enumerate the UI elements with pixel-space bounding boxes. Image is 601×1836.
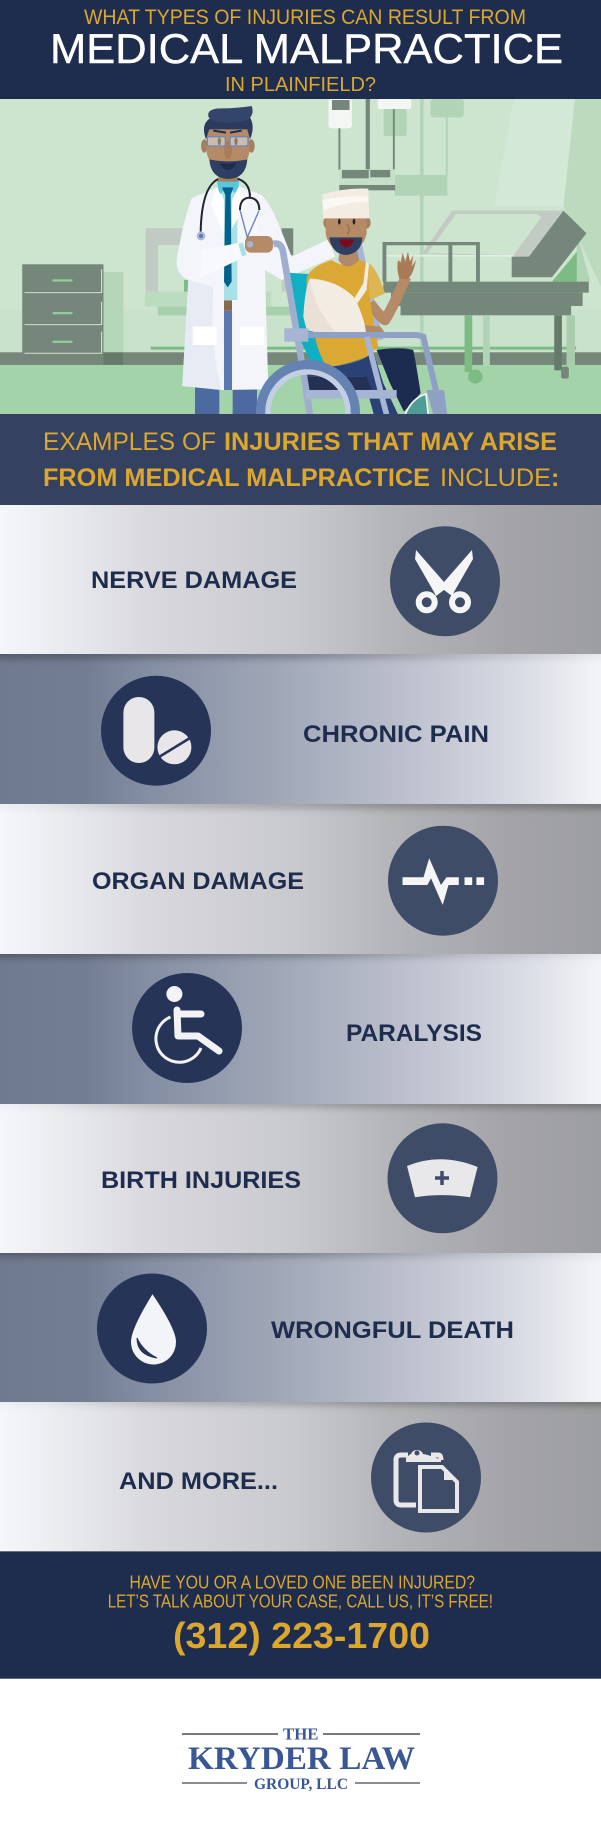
row: and more <box>0 1397 601 1551</box>
row: nerve damage <box>0 505 601 654</box>
logo: the kryder law group <box>182 1724 420 1793</box>
text: have you or a loved one: HAVE YOU OR A LOVED ONE BEEN INJURED? <box>130 1572 475 1592</box>
row: paralysis <box>0 949 601 1104</box>
icon: pulse <box>388 826 498 936</box>
panel: illustration of doctor and patient in hospital room <box>0 99 601 414</box>
phone number: (312) 223-1700 <box>173 1615 430 1656</box>
label: wrongful death: WRONGFUL DEATH <box>271 1317 514 1344</box>
label: paralysis: PARALYSIS <box>346 1020 482 1047</box>
label: organ damage: ORGAN DAMAGE <box>92 868 304 895</box>
text: examples line one: EXAMPLES OF <box>43 428 216 456</box>
row: chronic pain <box>0 650 601 804</box>
text: examples line two: INCLUDE <box>440 464 551 492</box>
row: wrongful death <box>0 1248 601 1402</box>
text: let's talk: LET’S TALK ABOUT YOUR CASE, CALL US, IT’S FREE! <box>108 1592 493 1612</box>
text: examples line one <box>43 428 557 456</box>
icon: wheelchair <box>132 973 242 1083</box>
icon: drop <box>97 1274 207 1384</box>
row: birth injuries <box>0 1099 601 1253</box>
label: chronic pain: CHRONIC PAIN <box>303 721 489 748</box>
logo: the kryder law group: THE <box>283 1724 318 1744</box>
row: organ damage <box>0 800 601 954</box>
heading: medical malpractice: MEDICAL MALPRACTICE <box>50 25 563 72</box>
panel: call to action <box>0 1551 601 1679</box>
text: examples line one: INJURIES THAT MAY ARISE <box>224 428 557 456</box>
hospital room background <box>0 99 601 416</box>
label: and more: AND MORE... <box>119 1468 278 1495</box>
wheelchair with patient <box>256 188 448 414</box>
icon: clipboard <box>371 1422 481 1532</box>
text: examples line two: FROM MEDICAL MALPRACTICE <box>43 464 430 492</box>
panel: title header <box>0 0 601 99</box>
panel: examples heading <box>0 414 601 505</box>
label: birth injuries: BIRTH INJURIES <box>101 1167 301 1194</box>
icon: scissors <box>390 526 500 636</box>
doctor and patient figures <box>176 106 448 414</box>
icon: pills <box>101 676 211 786</box>
logo: the kryder law group: GROUP, LLC <box>254 1776 348 1793</box>
icon: nurse cap <box>388 1123 498 1233</box>
heading line: in plainfield: IN PLAINFIELD? <box>225 73 376 96</box>
doctor <box>177 106 335 415</box>
logo: the kryder law group: KRYDER LAW <box>188 1741 415 1777</box>
heading line: what types of injuries: WHAT TYPES OF INJURIES CAN RESULT FROM <box>84 6 526 29</box>
label: nerve damage: NERVE DAMAGE <box>91 567 297 594</box>
text: examples line two: : <box>551 464 559 492</box>
